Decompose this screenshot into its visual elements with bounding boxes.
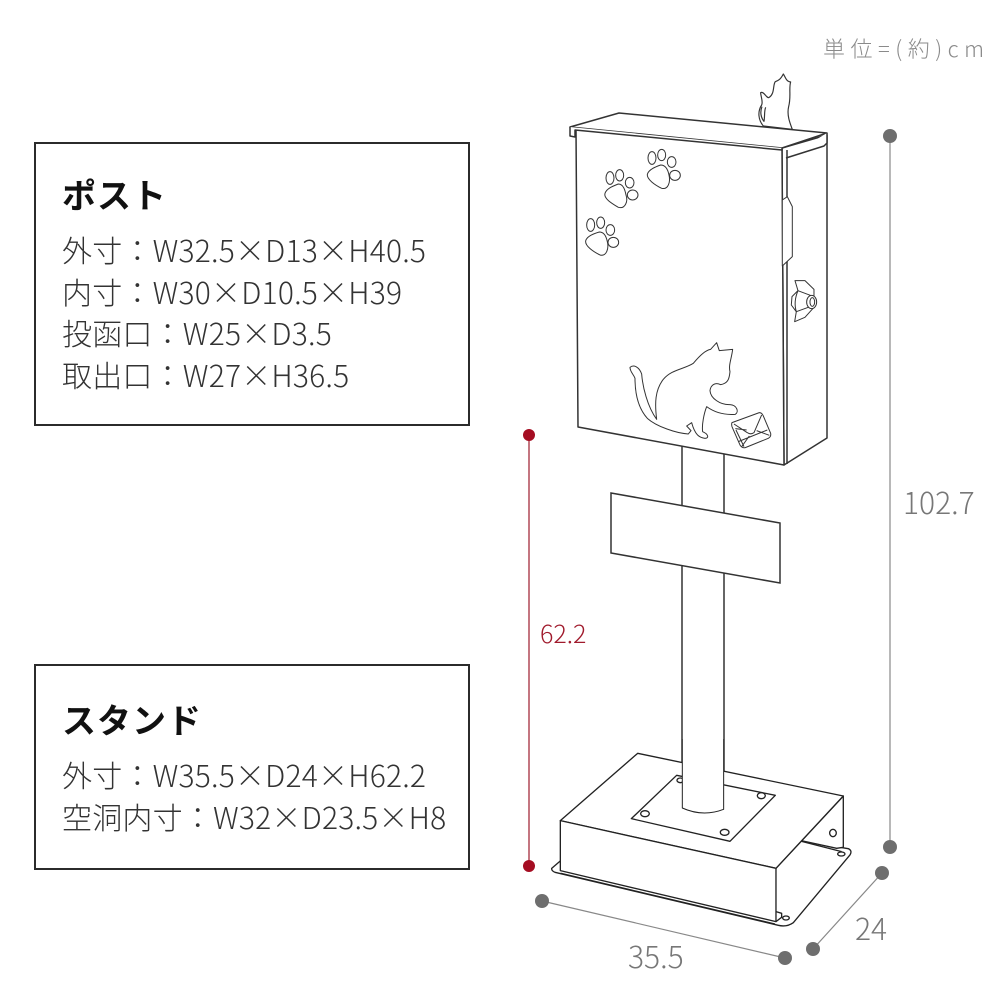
- post dimensions: 投函口：W25×D3.5: [62, 310, 332, 354]
- dimension: width 35.5: [535, 894, 792, 977]
- stand dimensions: [62, 752, 446, 838]
- base right flange: [799, 839, 842, 852]
- panel: stand specs: [34, 664, 470, 870]
- unit label: 単位=(約)cm: [823, 32, 990, 64]
- post dimensions: 取出口：W27×H36.5: [62, 352, 349, 396]
- stand heading: スタンド: [62, 694, 202, 743]
- mounting plate: [631, 775, 775, 841]
- mailbox stand pole: [682, 440, 724, 807]
- post dimensions: [62, 227, 426, 396]
- base top: [560, 753, 843, 868]
- door latch: [782, 197, 792, 266]
- envelope: [732, 413, 771, 448]
- paw prints: [586, 149, 680, 255]
- dimension: depth 24: [806, 866, 889, 956]
- dimension: height 102.7: [883, 129, 975, 854]
- base plate: [552, 840, 851, 926]
- dimension: stand height 62.2: 62.2: [540, 615, 586, 651]
- key lock: [791, 281, 817, 322]
- base right wall: [776, 796, 843, 868]
- cat and envelope: [630, 343, 771, 448]
- stand dimensions: 空洞内寸：W32×D23.5×H8: [62, 794, 446, 838]
- panel: post specs: [34, 142, 470, 426]
- post heading: ポスト: [62, 169, 167, 218]
- dimension: stand height 62.2: [523, 429, 586, 872]
- dimension: depth 24: 24: [855, 905, 887, 949]
- roof: [570, 113, 827, 148]
- stand dimensions: 外寸：W35.5×D24×H62.2: [62, 752, 426, 796]
- sitting cat on roof: [759, 74, 792, 129]
- name plate: [611, 493, 780, 583]
- pole foot: [682, 739, 724, 813]
- cat playing with letter: [630, 343, 737, 438]
- base front: [560, 821, 776, 922]
- dimension: width 35.5: 35.5: [628, 933, 684, 977]
- stand base: [552, 739, 851, 926]
- mailbox: [570, 74, 827, 465]
- post dimensions: 外寸：W32.5×D13×H40.5: [62, 227, 426, 271]
- post dimensions: 内寸：W30×D10.5×H39: [62, 269, 402, 313]
- dimension: height 102.7: 102.7: [903, 479, 975, 523]
- box front: [576, 129, 784, 465]
- box side: [782, 135, 827, 465]
